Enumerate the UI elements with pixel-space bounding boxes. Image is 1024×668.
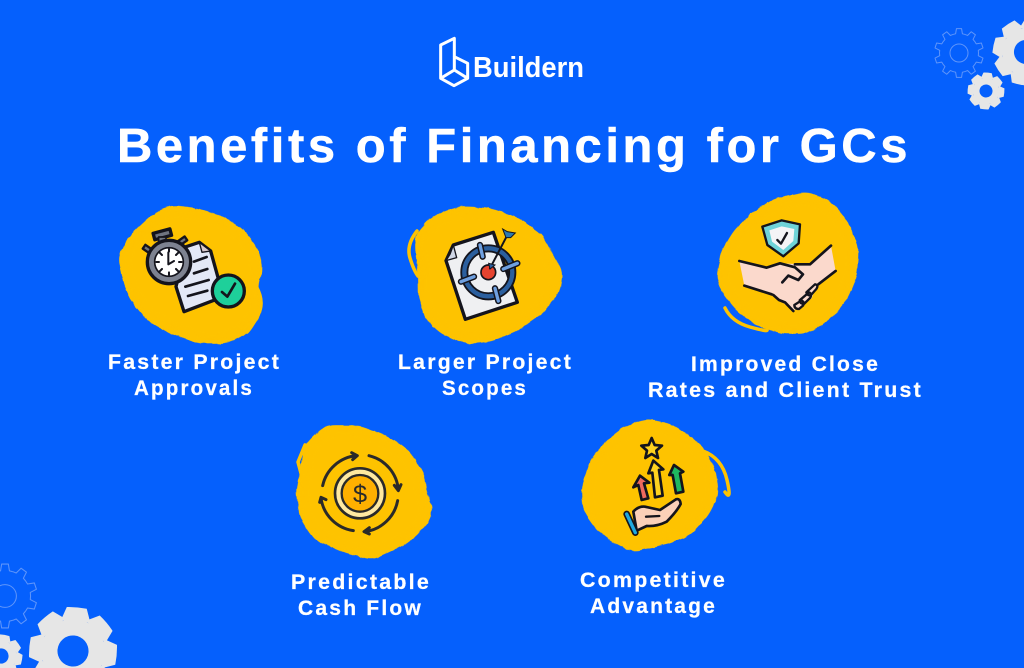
panel: Larger Project Scopes [398, 211, 573, 400]
icon: small gear [966, 71, 1006, 111]
label: Larger Project [398, 351, 573, 374]
icon: handshake with shield [739, 220, 836, 311]
label [291, 571, 431, 620]
yellow blob [721, 197, 854, 331]
label: Approvals [134, 377, 254, 400]
label: Improved Close [691, 353, 880, 376]
label: Advantage [590, 595, 717, 618]
label [580, 569, 727, 618]
panel: Competitive Advantage [580, 424, 729, 618]
label [108, 351, 281, 400]
logo wordmark: Buildern [473, 52, 584, 84]
icon: large gear [26, 604, 120, 668]
label [648, 353, 923, 402]
icon: document with target and arrow [446, 229, 517, 319]
yellow blob [298, 430, 429, 555]
icon: large gear [987, 13, 1024, 91]
yellow blob [409, 211, 558, 339]
icon: hand with rising arrows and star [627, 438, 683, 533]
label: Competitive [580, 569, 727, 592]
logo: Buildern [441, 38, 584, 86]
icon: stopwatch and approved document [143, 229, 244, 312]
label: Cash Flow [298, 597, 423, 620]
icon: small gear [0, 631, 26, 668]
icon: circular cash flow coin [320, 453, 401, 534]
label [398, 351, 573, 400]
label: Scopes [442, 377, 528, 400]
decorative gears: top right [934, 13, 1024, 111]
panel: Predictable Cash Flow [291, 430, 431, 620]
label: Predictable [291, 571, 431, 594]
title: Benefits of Financing for GCs [117, 120, 911, 173]
icon: logo cube [441, 38, 468, 86]
icon: outline gear [934, 29, 984, 77]
dollar sign: $ [353, 480, 367, 508]
decorative gears: bottom left [0, 564, 120, 668]
panel: Improved Close Rates and Client Trust [648, 197, 923, 402]
icon: outline gear [0, 564, 38, 628]
label: Faster Project [108, 351, 281, 374]
yellow blob [586, 424, 729, 547]
yellow blob [123, 210, 261, 339]
panel: Faster Project Approvals [108, 210, 281, 400]
label: Rates and Client Trust [648, 379, 923, 402]
